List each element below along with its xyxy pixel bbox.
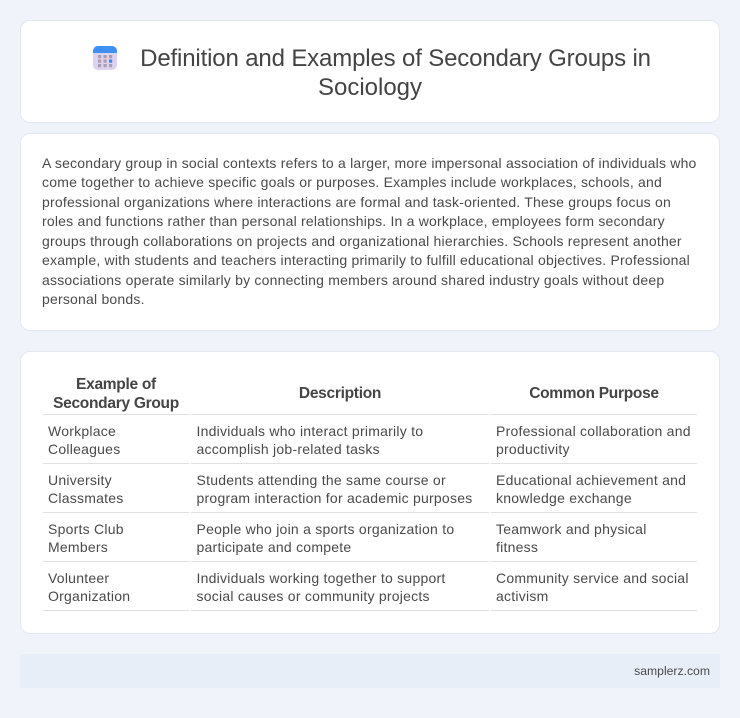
- definition text: come together to achieve specific goals or purposes. Examples include workplaces, schools, and: [42, 174, 662, 190]
- row: sports club members: Teamwork and physical: [496, 521, 647, 537]
- row: university classmates: Classmates: [48, 490, 124, 506]
- panel: definition: [20, 133, 720, 331]
- row: sports club members: fitness: [496, 539, 538, 555]
- row: volunteer organization: social causes or community projects: [196, 588, 430, 604]
- row: university classmates: [48, 472, 686, 506]
- row: volunteer organization: Community service and social: [496, 570, 689, 586]
- row: workplace colleagues: accomplish job-related tasks: [196, 441, 380, 457]
- panel: table: [20, 351, 720, 634]
- table header: Example of: [76, 376, 156, 393]
- row: volunteer organization: Volunteer: [48, 570, 109, 586]
- definition text: groups through collaborations on projects and organizational hierarchies. Schools represent another: [42, 233, 682, 249]
- row: sports club members: Members: [48, 539, 108, 555]
- definition text: example, with students and teachers interacting primarily to fulfill educational objectives. Professional: [42, 252, 690, 268]
- definition text: associations operate similarly by connecting members around shared industry goals without deep: [42, 272, 664, 288]
- row: volunteer organization: activism: [496, 588, 548, 604]
- table header: [53, 376, 659, 412]
- row: sports club members: People who join a sports organization to: [196, 521, 454, 537]
- row: workplace colleagues: Professional collaboration and: [496, 423, 691, 439]
- row: university classmates: knowledge exchange: [496, 490, 632, 506]
- icon: calendar: [93, 46, 117, 70]
- row: volunteer organization: Organization: [48, 588, 130, 604]
- row: workplace colleagues: productivity: [496, 441, 570, 457]
- row: university classmates: program interaction for academic purposes: [196, 490, 472, 506]
- definition text: roles and functions rather than personal relationships. In a workplace, employees form secondary: [42, 213, 665, 229]
- row: workplace colleagues: Workplace: [48, 423, 116, 439]
- row: volunteer organization: [48, 570, 689, 604]
- table header: Secondary Group: [53, 395, 179, 412]
- row: university classmates: Educational achievement and: [496, 472, 686, 488]
- row: workplace colleagues: [48, 423, 691, 457]
- footer text: samplerz.com: [634, 664, 710, 678]
- definition text: professional organizations where interactions are formal and task-oriented. These groups focus on: [42, 194, 671, 210]
- definition text: [42, 155, 697, 307]
- definition text: A secondary group in social contexts refers to a larger, more impersonal association of individuals who: [42, 155, 697, 171]
- row: sports club members: [48, 521, 647, 555]
- row: workplace colleagues: Individuals who interact primarily to: [196, 423, 423, 439]
- row: volunteer organization: Individuals working together to support: [196, 570, 446, 586]
- title: Sociology: [318, 74, 422, 101]
- table header: Description: [299, 385, 381, 402]
- panel: title card: [20, 20, 720, 123]
- row: sports club members: participate and compete: [196, 539, 351, 555]
- table header: Common Purpose: [529, 385, 659, 402]
- row: university classmates: Students attending the same course or: [196, 472, 446, 488]
- definition text: personal bonds.: [42, 291, 145, 307]
- footer bar: [20, 654, 720, 688]
- row: university classmates: University: [48, 472, 112, 488]
- row: workplace colleagues: Colleagues: [48, 441, 120, 457]
- title: Definition and Examples of Secondary Groups in: [140, 45, 651, 72]
- title: [140, 45, 651, 101]
- row: sports club members: Sports Club: [48, 521, 124, 537]
